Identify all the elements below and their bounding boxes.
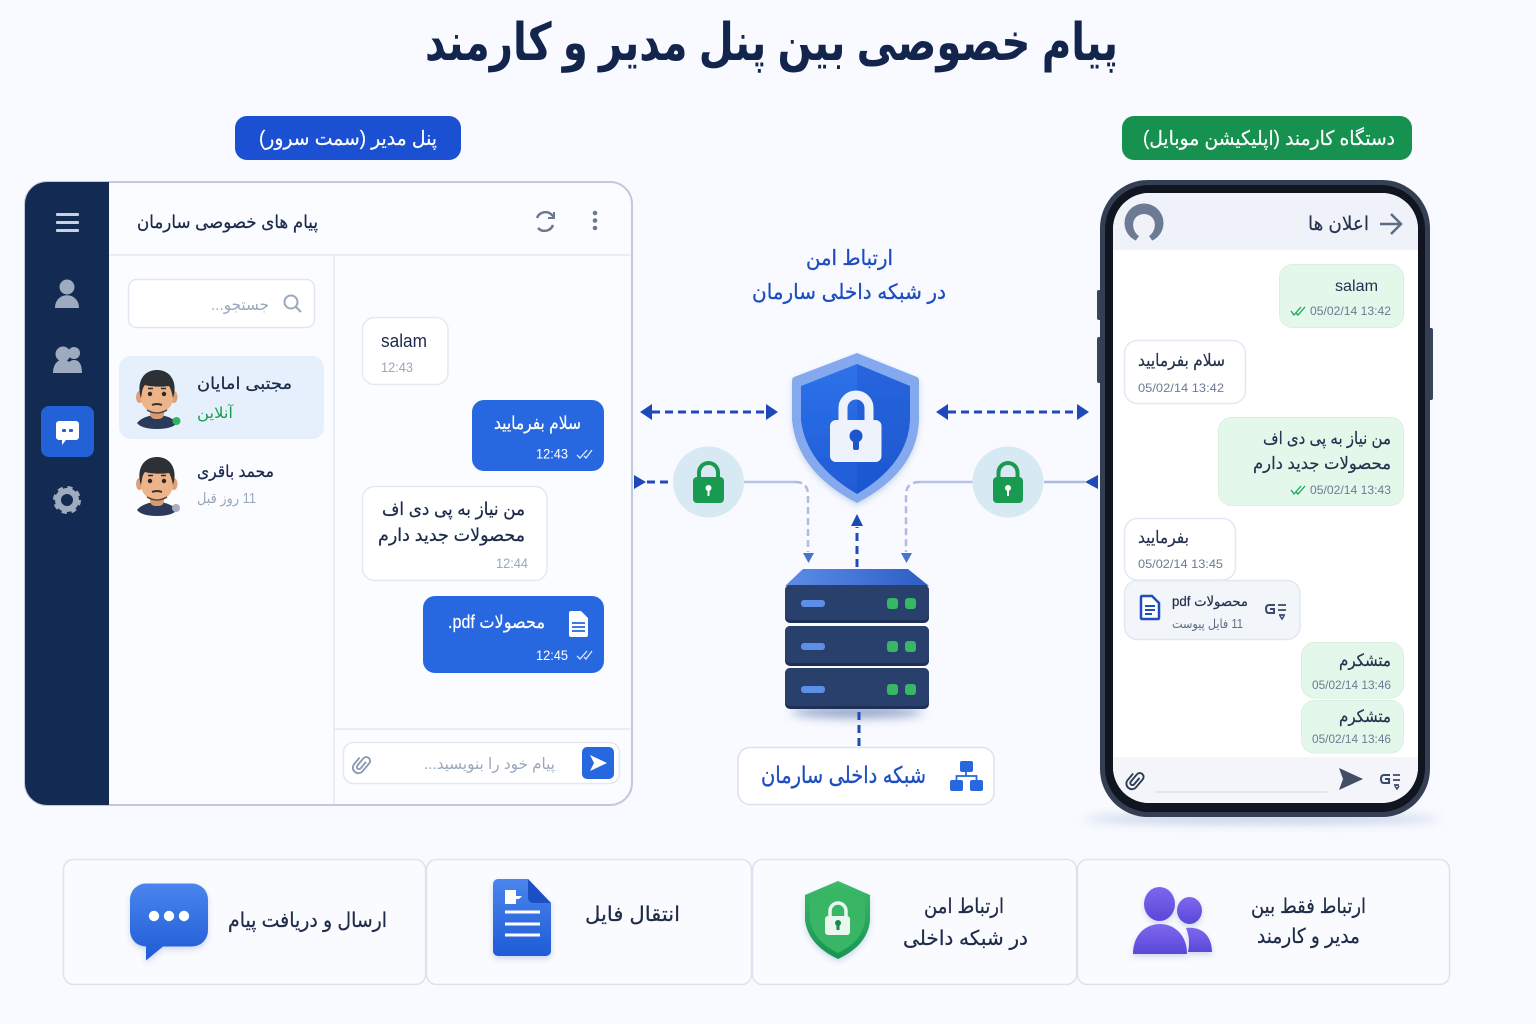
arrow: lock to panel <box>634 475 672 489</box>
bubble: greeting: 05/02/14 13:42 <box>1138 381 1224 395</box>
icon: translate <box>1381 775 1400 789</box>
icon: server stack <box>785 569 929 718</box>
bubble: go ahead <box>1124 518 1236 580</box>
message input: پیام خود را بنویسید... <box>424 756 555 774</box>
heading pill: admin panel: پنل مدیر (سمت سرور) <box>259 128 437 151</box>
avatar <box>136 457 178 516</box>
icon: left lock circle <box>673 446 744 518</box>
icon: document <box>1141 596 1159 619</box>
connector: server to network <box>858 712 860 747</box>
feature card: secure <box>752 860 1076 984</box>
search box: جستجو... <box>211 297 269 315</box>
message: request: 12:44 <box>496 555 528 571</box>
secure connection heading <box>752 247 946 304</box>
icon: group <box>53 346 82 373</box>
phone header: اعلان ها <box>1308 214 1369 235</box>
contact: active <box>119 356 324 439</box>
icon: right lock circle <box>972 446 1044 518</box>
network label: شبکه داخلی سارمان <box>761 762 926 789</box>
bubble: thanks two: متشکرم <box>1339 707 1391 726</box>
icon: attach <box>351 753 372 775</box>
contact: active: آنلاین <box>197 404 234 422</box>
bubble: file attachment: محصولات pdf <box>1172 594 1248 610</box>
icon: people <box>1133 887 1212 954</box>
message: salam <box>362 318 448 384</box>
icon: settings gear <box>55 488 79 512</box>
bubble: thanks one: 05/02/14 13:46 <box>1312 678 1391 692</box>
feature card: secure: ارتباط امن <box>924 895 1004 918</box>
icon: send <box>1339 768 1363 790</box>
message: file <box>423 596 604 673</box>
icon: user <box>55 280 79 308</box>
secure connection heading: ارتباط امن <box>806 247 893 270</box>
feature card: messaging: ارسال و دریافت پیام <box>228 909 387 932</box>
icon: translate <box>1266 605 1286 619</box>
bubble: salam: 05/02/14 13:42 <box>1310 304 1391 318</box>
bubble: thanks two: 05/02/14 13:46 <box>1312 732 1391 746</box>
feature card: messaging <box>64 860 426 984</box>
message: file: محصولات pdf. <box>448 612 545 633</box>
contact: second <box>136 457 274 516</box>
bubble: thanks one <box>1302 642 1404 698</box>
arrow: lock to phone <box>1044 475 1098 489</box>
contact: second: 11 روز قبل <box>197 491 256 507</box>
icon: document <box>493 879 551 956</box>
search box <box>128 280 314 328</box>
message input <box>344 742 620 784</box>
arrow: panel to shield <box>640 404 778 420</box>
bubble: thanks one: متشکرم <box>1339 651 1391 670</box>
bubble: go ahead: 05/02/14 13:45 <box>1138 557 1223 571</box>
message: request: محصولات جدید دارم <box>378 525 525 546</box>
icon: central shield <box>792 353 919 503</box>
feature card: scope <box>1078 860 1450 984</box>
panel: admin window <box>25 182 632 805</box>
feature card: file transfer <box>426 860 752 984</box>
device: phone <box>1084 180 1440 823</box>
bubble: greeting: سلام بفرمایید <box>1138 351 1225 370</box>
icon: refresh <box>537 212 554 231</box>
bubble: request: محصولات جدید دارم <box>1253 454 1391 473</box>
heading pill: admin panel <box>235 116 461 160</box>
header title: پیام های خصوصی سارمان <box>137 212 318 233</box>
message: file: 12:45 <box>536 647 568 663</box>
message: reply: سلام بفرمایید <box>494 413 581 434</box>
title: پیام خصوصی بین پنل مدیر و کارمند <box>425 14 1118 73</box>
bubble: thanks two <box>1302 700 1404 753</box>
message: request <box>362 486 547 580</box>
network label <box>738 748 994 804</box>
phone header <box>1113 193 1418 250</box>
phone input bar <box>1113 757 1418 803</box>
bubble: request: 05/02/14 13:43 <box>1310 483 1391 497</box>
feature card: scope: ارتباط فقط بین <box>1251 895 1366 918</box>
feature card: secure: در شبکه داخلی <box>903 927 1028 950</box>
feature card: scope: مدیر و کارمند <box>1257 925 1360 948</box>
bubble: salam <box>1280 264 1404 328</box>
heading pill: employee device <box>1122 116 1412 160</box>
message: salam: 12:43 <box>381 359 413 375</box>
contact: second: محمد باقری <box>197 463 274 482</box>
icon: green shield <box>805 881 870 959</box>
arrow: shield to phone <box>936 404 1089 420</box>
heading pill: employee device: دستگاه کارمند (اپلیکیشن موبایل) <box>1143 127 1395 151</box>
icon: network <box>950 761 983 791</box>
icon: attach <box>1124 769 1145 791</box>
arrow: server to shield <box>851 514 863 567</box>
icon: active chat <box>41 406 94 457</box>
icon: menu <box>56 213 79 232</box>
connector: left lock to server <box>744 482 814 563</box>
message: reply <box>472 400 604 471</box>
bubble: request <box>1218 418 1404 506</box>
bubble: salam: salam <box>1335 278 1378 295</box>
bubble: file attachment: 11 فایل پیوست <box>1172 617 1243 632</box>
avatar <box>136 370 178 429</box>
message: reply: 12:43 <box>536 446 568 462</box>
bubble: file attachment <box>1124 580 1300 640</box>
feature card: file transfer: انتقال فایل <box>585 903 680 926</box>
icon: profile <box>1124 204 1164 243</box>
sidebar <box>25 182 109 805</box>
send button <box>582 747 614 779</box>
secure connection heading: در شبکه داخلی سارمان <box>752 281 946 304</box>
message: request: من نیاز به پی دی اف <box>382 499 525 520</box>
icon: back arrow <box>1380 214 1401 234</box>
bubble: go ahead: بفرمایید <box>1138 528 1189 547</box>
bubble: request: من نیاز به پی دی اف <box>1263 429 1391 449</box>
icon: chat bubble <box>130 884 208 960</box>
window header rule <box>109 255 631 804</box>
contact: active: مجتبی امایان <box>197 375 292 393</box>
bubble: greeting <box>1124 340 1246 404</box>
connector: right lock to server <box>901 482 973 563</box>
icon: more menu <box>593 211 597 230</box>
message: salam: salam <box>381 331 427 351</box>
